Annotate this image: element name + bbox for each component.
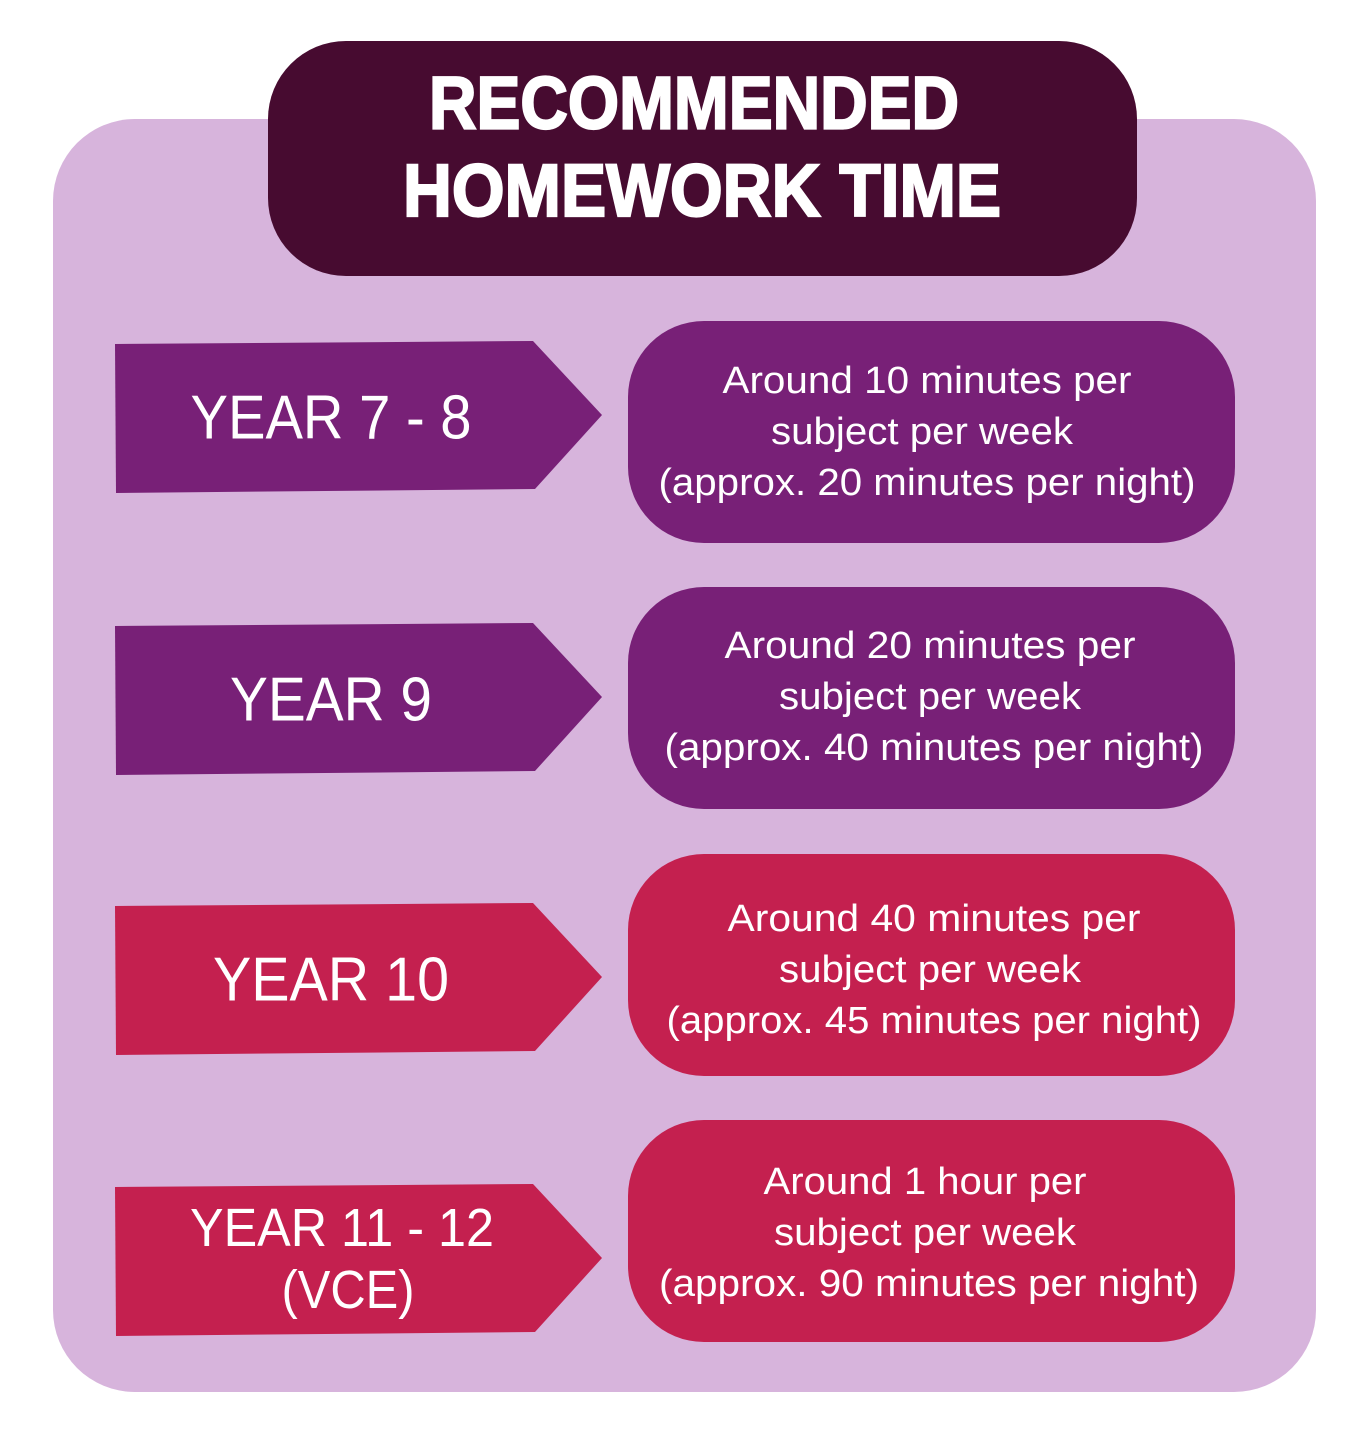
arrow: year 11-12 — [115, 1184, 602, 1336]
row: year 9 — [115, 587, 1235, 809]
title: HOMEWORK TIME — [403, 149, 1001, 232]
arrow: year 11-12: (VCE) — [282, 1260, 414, 1320]
description: year 10 — [628, 854, 1235, 1076]
arrow: year 10: YEAR 10 — [213, 946, 449, 1014]
description: year 9: (approx. 40 minutes per night) — [664, 727, 1204, 769]
description: year 10: subject per week — [779, 949, 1082, 991]
description: year 7-8 — [628, 321, 1235, 543]
arrow: year 11-12: YEAR 11 - 12 — [190, 1198, 494, 1258]
arrow: year 7-8 — [115, 341, 602, 493]
description: year 10: Around 40 minutes per — [728, 898, 1141, 940]
description: year 7-8: Around 10 minutes per — [722, 360, 1132, 402]
row: year 7-8 — [115, 321, 1235, 543]
description: year 7-8: subject per week — [771, 411, 1074, 453]
arrow: year 10 — [115, 903, 602, 1055]
row: year 10 — [115, 854, 1235, 1076]
row: year 11-12 — [115, 1120, 1235, 1342]
description: year 9 — [628, 587, 1235, 809]
description: year 9: Around 20 minutes per — [724, 625, 1136, 667]
arrow: year 9: YEAR 9 — [230, 666, 432, 734]
arrow: year 9 — [115, 623, 602, 775]
description: year 10: (approx. 45 minutes per night) — [666, 1000, 1202, 1042]
description: year 9: subject per week — [779, 676, 1082, 718]
title — [268, 41, 1137, 276]
description: year 11-12: subject per week — [774, 1212, 1077, 1254]
description: year 11-12: (approx. 90 minutes per night) — [659, 1263, 1199, 1305]
arrow: year 7-8: YEAR 7 - 8 — [190, 384, 472, 452]
description: year 11-12 — [628, 1120, 1235, 1342]
description: year 11-12: Around 1 hour per — [764, 1161, 1087, 1203]
title: RECOMMENDED — [429, 62, 959, 144]
description: year 7-8: (approx. 20 minutes per night) — [658, 462, 1196, 504]
